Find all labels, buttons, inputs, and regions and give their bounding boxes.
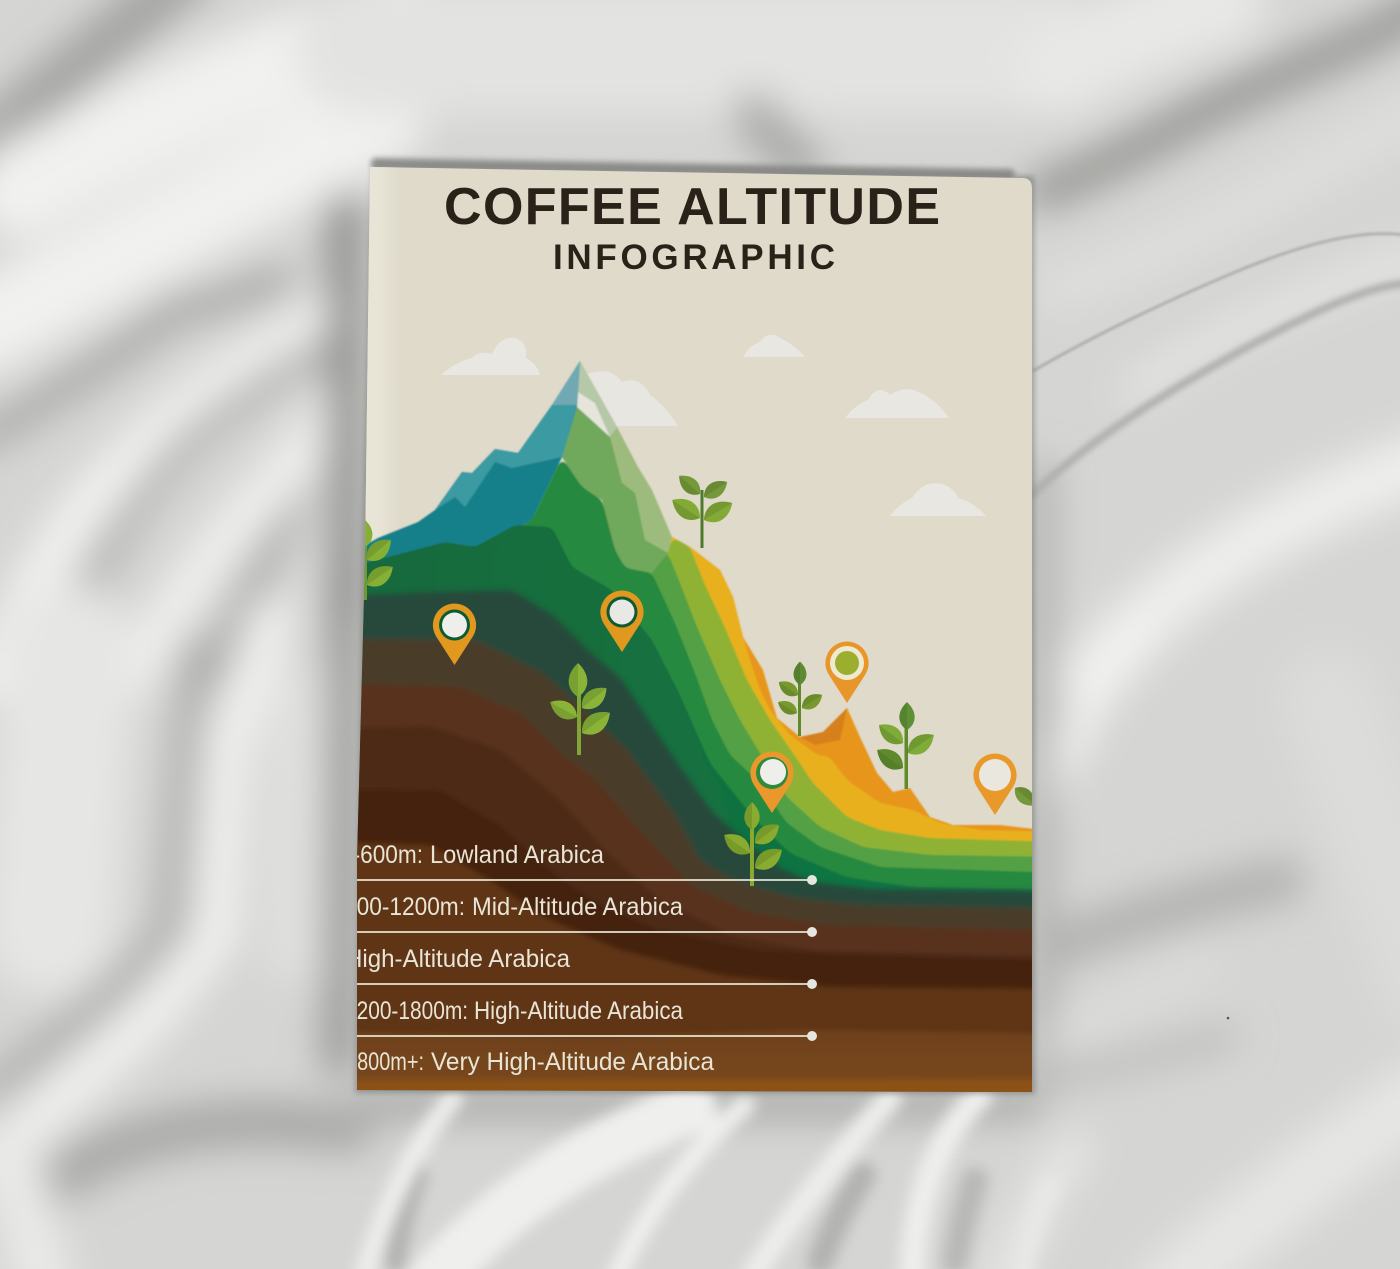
peak: pale green snow flank [577,361,672,557]
plant: above first line [719,802,787,886]
layer: mid green [647,554,1032,873]
plant: right edge leaf [1010,782,1040,811]
layer: light brown soil [357,1030,1032,1080]
layer: warm brown soil [357,842,1032,1038]
legend: altitude labels [340,841,817,1076]
label: very high altitude name: Very High-Altitude Arabica [431,1048,714,1076]
book shadow [355,165,1035,1094]
pin: slope [750,751,794,813]
layer: lime [666,540,1032,858]
label: mid altitude range: 600-1200m: [344,893,465,921]
cloud: lower right [890,483,986,516]
label: very high altitude range: 1800m+: [346,1048,424,1076]
label: high altitude short: High-Altitude Arabica [345,945,570,973]
label: high altitude range: 1200-1800m: [345,997,468,1025]
peak: light green face [562,407,668,573]
layer: base band [357,1078,1032,1092]
cloud: top right [743,335,805,357]
mountain altitude layers [357,360,1032,1092]
layer: olive soil [362,636,1032,930]
pin: middle [600,590,644,652]
peak: translucent tip right [578,361,617,437]
pin: far right [973,753,1017,815]
cover paper [340,160,1040,1100]
title: COFFEE ALTITUDE [444,178,940,236]
plant: slope small [775,662,826,736]
book cover [357,167,1032,1092]
peak: snow gap [577,392,610,437]
layer: green [522,461,1032,890]
pin: left [433,603,476,665]
label: mid altitude name: Mid-Altitude Arabica [472,893,683,921]
plant: left edge sprig [364,520,393,600]
pin: upper right [825,641,869,703]
layer: dark teal soil [363,588,1032,910]
layer: brown soil [360,684,1032,961]
layer: dark brown soil [359,728,1032,962]
label: lowland range: 0-600m: [340,841,423,869]
layer: yellow [670,538,1032,842]
cloud: left [441,338,540,375]
spine highlight [365,167,392,541]
plant: summit shoulder [672,476,732,548]
layer: deep green [362,524,1032,892]
cloud: right [845,389,949,418]
plant: on soil centre [546,663,615,755]
layer: orange lowland [524,507,1032,832]
layer: deepest brown soil [358,790,1032,989]
label: lowland name: Lowland Arabica [430,841,604,869]
plant: slope large [872,702,939,789]
subtitle: INFOGRAPHIC [553,238,835,277]
cloud: behind peak [585,371,678,426]
label: high altitude name: High-Altitude Arabica [474,997,683,1025]
peak: light teal face [435,405,577,510]
peak: teal face [350,361,580,572]
facet: orange shadow [800,708,847,745]
peak: teal tip [552,361,580,405]
